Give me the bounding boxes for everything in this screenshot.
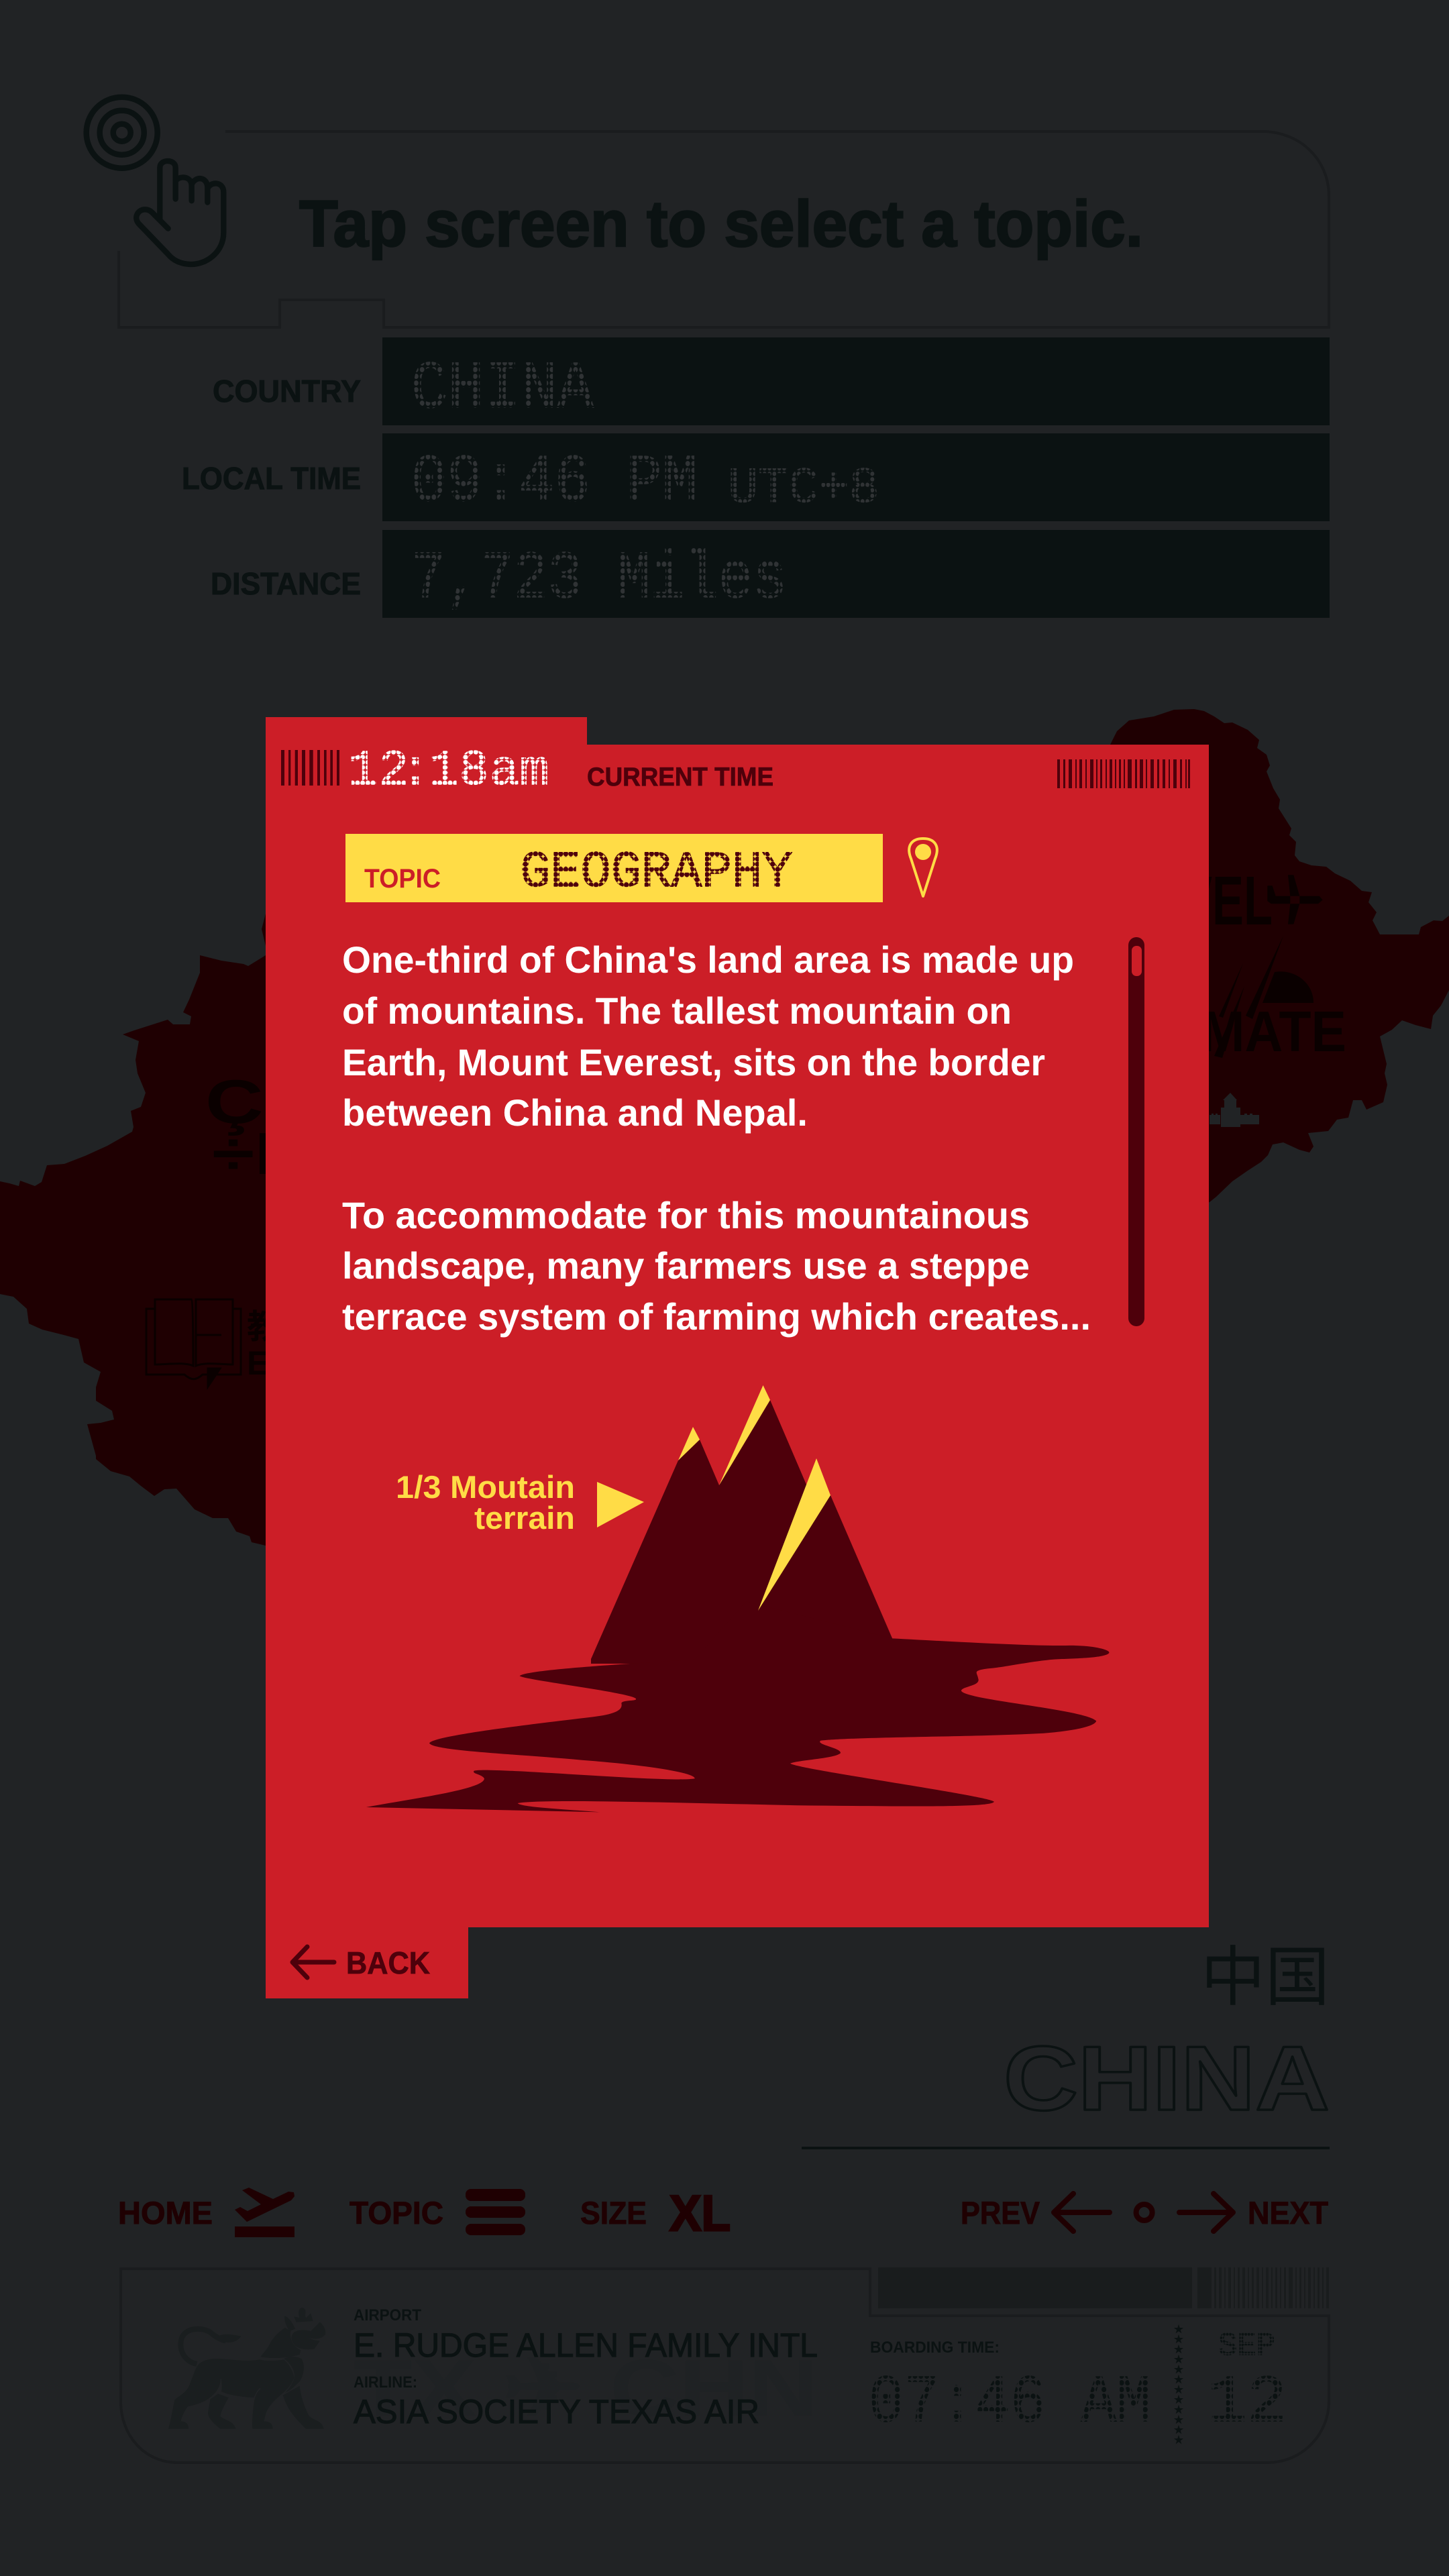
bottom right: country name block xyxy=(1004,1941,1330,2129)
day: 12 xyxy=(1208,2366,1287,2442)
boarding time label: BOARDING TIME: xyxy=(870,2339,1000,2357)
scrollbar xyxy=(1128,937,1144,1326)
current time value: 12:18am xyxy=(348,743,549,800)
prev label: PREV xyxy=(961,2195,1040,2231)
navigation row xyxy=(118,2185,1328,2241)
topic label: TOPIC xyxy=(350,2195,443,2231)
body text: One-third of China's land area is made up xyxy=(342,938,1074,981)
icon: airplane xyxy=(1267,875,1323,924)
star divider: ★ xyxy=(1173,2434,1184,2446)
body text: landscape, many farmers use a steppe xyxy=(342,1244,1030,1287)
topic bar xyxy=(345,834,883,902)
callout: mountain terrain: terrain xyxy=(474,1500,575,1536)
star divider: ★ xyxy=(1173,2334,1184,2345)
back button: BACK xyxy=(346,1945,430,1980)
current time label: CURRENT TIME xyxy=(587,763,773,792)
panel: boarding pass xyxy=(121,2267,1329,2463)
map of China xyxy=(0,709,1449,1546)
icon: open book xyxy=(146,1299,241,1387)
home label: HOME xyxy=(118,2195,213,2231)
boarding barcode xyxy=(878,2267,1329,2308)
map label: culture xyxy=(205,1068,326,1187)
star divider: ★ xyxy=(1173,2384,1184,2396)
body text: To accommodate for this mountainous xyxy=(342,1194,1030,1236)
body text: Earth, Mount Everest, sits on the border xyxy=(342,1041,1045,1083)
display: local time: LOCAL TIME xyxy=(182,461,361,496)
icon: climate rain and dome xyxy=(1214,936,1313,1058)
icon: topic stack xyxy=(466,2189,525,2235)
body text: between China and Nepal. xyxy=(342,1091,808,1134)
ticket outline xyxy=(121,2269,1329,2463)
barcode left xyxy=(281,750,339,786)
topic bar: GEOGRAPHY xyxy=(520,844,793,902)
panel: tap prompt frame xyxy=(87,97,1329,327)
barcode right xyxy=(1057,759,1190,788)
callout: mountain terrain xyxy=(396,1469,644,1536)
modal background xyxy=(266,717,1209,1998)
divider xyxy=(802,2147,1330,2149)
ghost route text: TX ✈ CHN xyxy=(354,2343,818,2433)
chinese name: 中国 xyxy=(1201,1941,1330,2014)
icon: target rings xyxy=(87,97,158,168)
icon: pointing hand xyxy=(136,161,223,264)
airport name: E. RUDGE ALLEN FAMILY INTL xyxy=(354,2326,818,2364)
display: country: COUNTRY xyxy=(213,374,361,409)
display: local time: UTC+8 xyxy=(728,461,879,517)
title: Tap screen to select a topic. xyxy=(299,187,1143,260)
illustration: mountains and river xyxy=(366,1385,1109,1812)
display: country xyxy=(213,337,1330,428)
callout: mountain terrain: 1/3 Moutain xyxy=(396,1469,575,1505)
map label: education: E xyxy=(247,1344,269,1382)
display: country: CHINA xyxy=(411,352,594,428)
map label: education: 教 xyxy=(247,1308,280,1346)
panel: flight info displays xyxy=(182,337,1330,618)
star divider: ★ xyxy=(1173,2364,1184,2375)
display: distance xyxy=(211,530,1330,618)
month: SEP xyxy=(1218,2328,1275,2365)
star divider xyxy=(1173,2324,1184,2446)
icon: great wall xyxy=(1210,1093,1259,1127)
size label: SIZE xyxy=(580,2195,647,2231)
icon: takeoff xyxy=(235,2188,294,2237)
body text xyxy=(342,938,1091,1338)
star divider: ★ xyxy=(1173,2394,1184,2406)
back button xyxy=(292,1945,430,1980)
airline name: ASIA SOCIETY TEXAS AIR xyxy=(354,2393,759,2430)
star divider: ★ xyxy=(1173,2324,1184,2335)
star divider: ★ xyxy=(1173,2404,1184,2416)
display: local time: 09:46 PM xyxy=(411,445,698,521)
map label: education xyxy=(247,1308,280,1382)
map label: travel: VEL xyxy=(1181,862,1273,939)
china outlined wordmark: CHINA xyxy=(1004,2027,1330,2129)
frame outline xyxy=(119,131,1329,327)
panel: geography topic modal xyxy=(266,717,1209,1998)
body text: terrace system of farming which creates... xyxy=(342,1295,1091,1338)
star divider: ★ xyxy=(1173,2354,1184,2365)
topic bar: TOPIC xyxy=(364,864,441,894)
map label: culture: ÷E xyxy=(212,1120,306,1187)
airline label: AIRLINE: xyxy=(354,2373,417,2392)
display: distance: 7,723 Miles xyxy=(411,542,787,618)
icon: lion emblem xyxy=(168,2308,325,2429)
star divider: ★ xyxy=(1173,2414,1184,2426)
icon: next arrow xyxy=(1179,2194,1233,2231)
map label: climate: MATE xyxy=(1201,1000,1346,1064)
map label: culture: ÇO xyxy=(205,1068,326,1136)
star divider: ★ xyxy=(1173,2374,1184,2385)
icon: prev arrow xyxy=(1054,2194,1110,2231)
next label: NEXT xyxy=(1248,2195,1328,2231)
display: local time xyxy=(182,433,1330,521)
icon: pager dot xyxy=(1136,2204,1152,2220)
body text: of mountains. The tallest mountain on xyxy=(342,989,1012,1032)
icon: location pin xyxy=(909,839,937,896)
display: distance: DISTANCE xyxy=(211,566,361,601)
star divider: ★ xyxy=(1173,2424,1184,2436)
star divider: ★ xyxy=(1173,2344,1184,2355)
size value: XL xyxy=(669,2185,731,2241)
airport label: AIRPORT xyxy=(354,2306,421,2324)
boarding time value: 07:46 AM xyxy=(869,2366,1152,2442)
